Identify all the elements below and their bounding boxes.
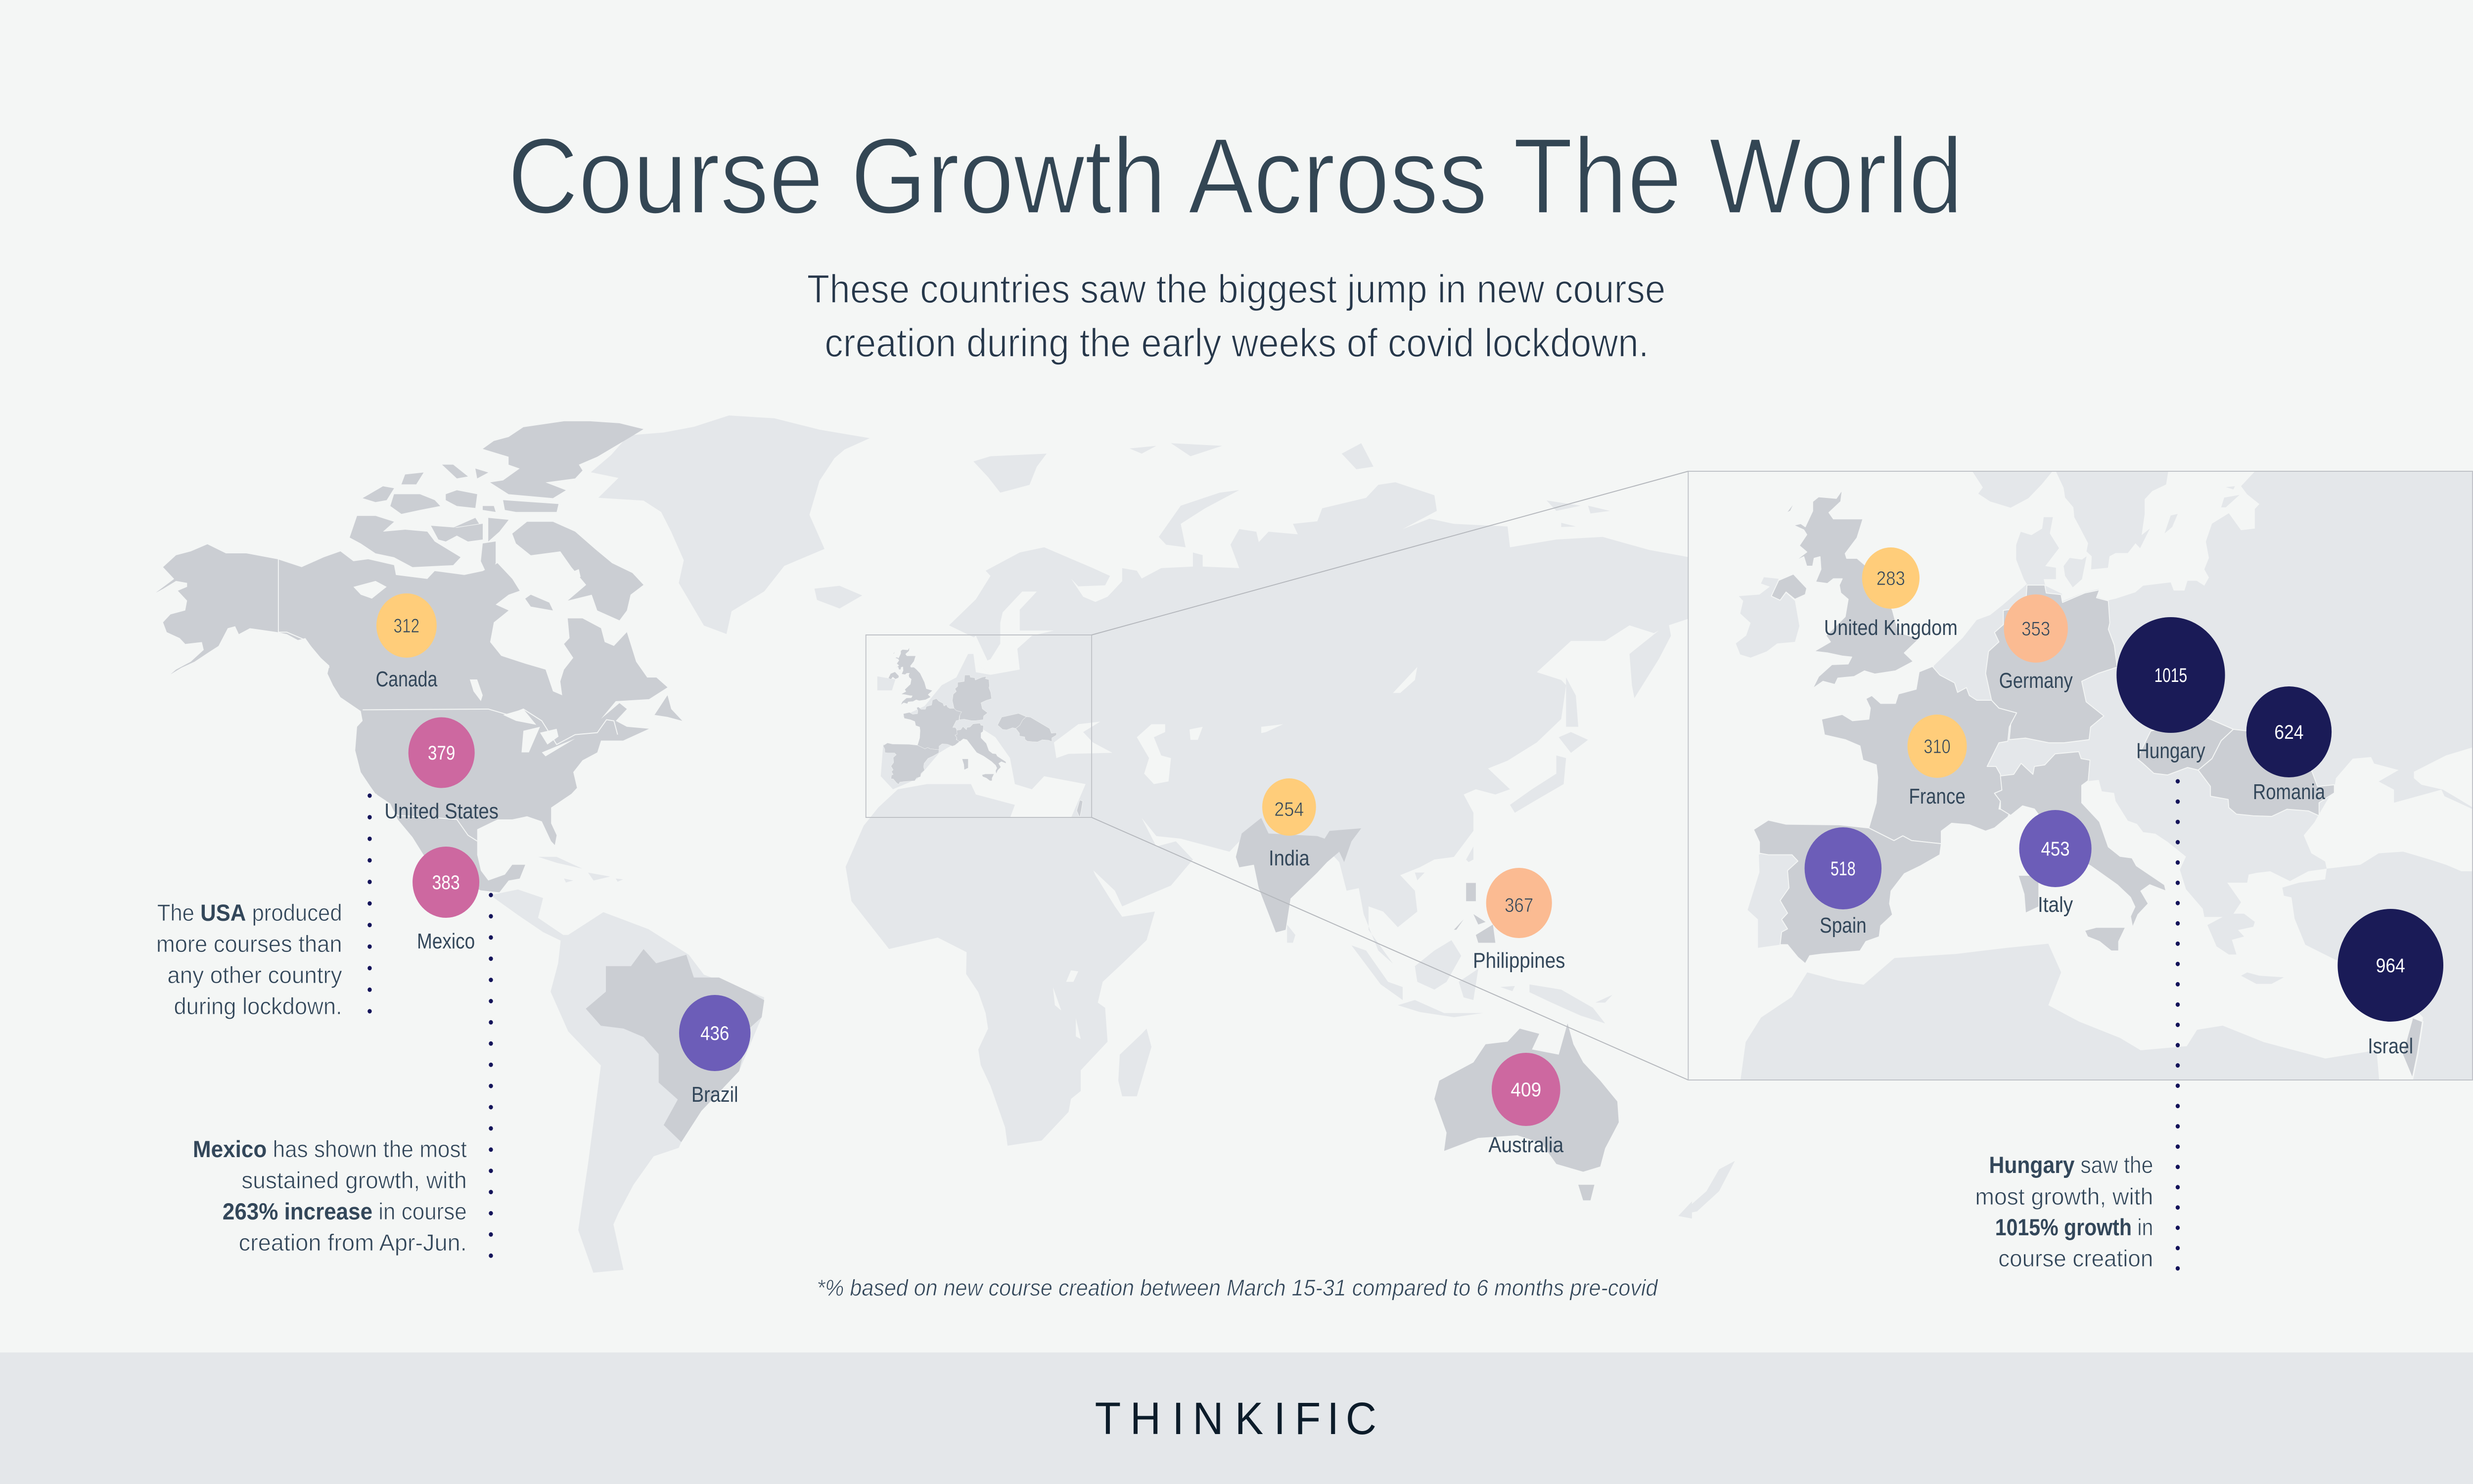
callout: Mexico xyxy=(193,1136,467,1256)
Sea of Azov xyxy=(2414,747,2473,808)
India xyxy=(1236,818,1361,932)
bubble: Romania xyxy=(2246,686,2332,804)
lakes xyxy=(354,569,581,757)
inset dark countries xyxy=(1753,490,2423,1079)
bubble: Hungary xyxy=(2116,617,2225,763)
bubble: Germany: Germany xyxy=(1999,669,2073,693)
bubble: Italy xyxy=(2019,810,2092,917)
callout: USA: during lockdown. xyxy=(174,993,342,1019)
zoom box on small Europe xyxy=(866,635,1092,817)
subtitle: creation during the early weeks of covid lockdown. xyxy=(824,320,1649,365)
bubble: India: 254 xyxy=(1274,799,1304,820)
bubble: Australia: 409 xyxy=(1511,1079,1541,1101)
callout: Mexico: creation from Apr-Jun. xyxy=(239,1230,467,1256)
callout: Mexico: 263% increase in course xyxy=(223,1199,467,1224)
callout: Hungary: most growth, with xyxy=(1975,1184,2153,1210)
inset light land, east xyxy=(1932,471,2473,1082)
callout: USA: The USA produced xyxy=(157,900,342,926)
bubble: United States: United States xyxy=(384,799,499,823)
Africa xyxy=(846,784,1155,1146)
Black Sea xyxy=(2320,757,2472,814)
inset Africa xyxy=(1740,944,2379,1080)
African lakes xyxy=(1053,970,1081,1039)
country borders xyxy=(278,559,618,841)
bubble: Mexico: Mexico xyxy=(417,929,475,953)
bubble: Hungary: 1015 xyxy=(2154,665,2187,686)
inset Ireland and Portugal xyxy=(1736,577,1799,948)
bubble: Brazil: Brazil xyxy=(691,1082,738,1107)
Anatolia and Levant xyxy=(2283,852,2473,1082)
bubble: Brazil xyxy=(679,995,750,1107)
mainland xyxy=(156,544,668,893)
map: Greenland, Iceland and South America xyxy=(490,415,870,1273)
title: Course Growth Across The World xyxy=(507,116,1963,236)
bubble: United States xyxy=(384,717,499,823)
dotted leader: Hungary xyxy=(2175,781,2180,1270)
bubble: Canada: 312 xyxy=(394,615,419,637)
callout: Hungary: 1015% growth in xyxy=(1995,1214,2153,1240)
Australia and Tasmania xyxy=(1434,1024,1619,1200)
bubble: France: France xyxy=(1909,784,1966,809)
footer band xyxy=(0,1352,2473,1484)
bubble: Italy: Italy xyxy=(2038,893,2073,917)
Arctic islands xyxy=(350,421,682,721)
bubble: Mexico: 383 xyxy=(432,872,460,894)
logo: Thinkific: THINKIFIC xyxy=(1095,1393,1376,1444)
bubble: Hungary: Hungary xyxy=(2136,739,2205,763)
connector lines to inset xyxy=(1092,471,1688,1080)
bubble: India: India xyxy=(1269,846,1310,870)
subtitle: These countries saw the biggest jump in new course xyxy=(807,267,1665,312)
map: Europe, Asia, Africa and Oceania xyxy=(846,443,1692,1218)
bubble: United Kingdom: United Kingdom xyxy=(1824,616,1958,640)
bubble: India xyxy=(1262,778,1316,870)
callout: Mexico: sustained growth, with xyxy=(241,1168,467,1193)
dotted leader: Mexico xyxy=(489,895,493,1257)
bubble: Canada xyxy=(376,593,438,691)
map: New Zealand xyxy=(1680,1161,1735,1215)
callout: Mexico: Mexico has shown the most xyxy=(193,1136,467,1162)
bubble: Israel xyxy=(2337,909,2443,1058)
dotted leader: USA xyxy=(367,796,372,1014)
callout: Hungary: course creation xyxy=(1998,1246,2153,1271)
bubble: Philippines: Philippines xyxy=(1473,948,1565,973)
subtitle xyxy=(807,267,1665,365)
islands xyxy=(877,443,1692,1218)
callout: Hungary: Hungary saw the xyxy=(1989,1152,2153,1178)
bubble: Philippines: 367 xyxy=(1505,895,1533,916)
Brazil xyxy=(586,949,764,1142)
bubble: Israel: Israel xyxy=(2368,1034,2413,1058)
callout: USA xyxy=(156,900,342,1019)
callout: Hungary xyxy=(1975,1152,2153,1271)
bubble: United Kingdom xyxy=(1824,547,1958,640)
bubble: Mexico xyxy=(412,847,479,953)
Iceland xyxy=(815,586,862,608)
bubble: Australia xyxy=(1488,1053,1563,1157)
South and Central America xyxy=(490,890,764,1273)
callout: USA: any other country xyxy=(167,962,342,988)
map: North America xyxy=(156,421,682,893)
Philippines xyxy=(1454,883,1495,943)
bubble: Spain xyxy=(1805,827,1881,938)
Greenland xyxy=(591,415,870,634)
bubble: United States: 379 xyxy=(428,742,455,764)
Caribbean xyxy=(538,857,623,883)
bubble: Spain: 518 xyxy=(1831,858,1856,880)
bubble: Israel: 964 xyxy=(2376,955,2405,977)
bubble: Brazil: 436 xyxy=(700,1023,729,1044)
bubble: Romania: Romania xyxy=(2253,780,2325,804)
bubble: United Kingdom: 283 xyxy=(1877,568,1905,589)
bubble: Romania: 624 xyxy=(2274,721,2303,743)
bubble: France xyxy=(1908,715,1967,809)
bubble: Italy: 453 xyxy=(2041,838,2070,860)
callout: USA: more courses than xyxy=(156,931,342,957)
footnote: *% based on new course creation between March 15-31 compared to 6 months pre-covid xyxy=(817,1276,1658,1301)
bubble: Canada: Canada xyxy=(376,667,438,691)
bubble: Germany: 353 xyxy=(2021,618,2050,640)
bubble: Spain: Spain xyxy=(1820,913,1867,938)
Eurasia xyxy=(881,482,1692,964)
bubble: Philippines xyxy=(1473,868,1565,973)
highlighted European countries on world map xyxy=(883,647,1083,818)
Baltic and inland seas xyxy=(961,591,1418,784)
panel: Europe inset map xyxy=(1688,471,2473,1082)
bubble: Australia: Australia xyxy=(1488,1133,1563,1157)
bubble: France: 310 xyxy=(1923,736,1951,758)
bubble: Germany xyxy=(1999,594,2073,693)
